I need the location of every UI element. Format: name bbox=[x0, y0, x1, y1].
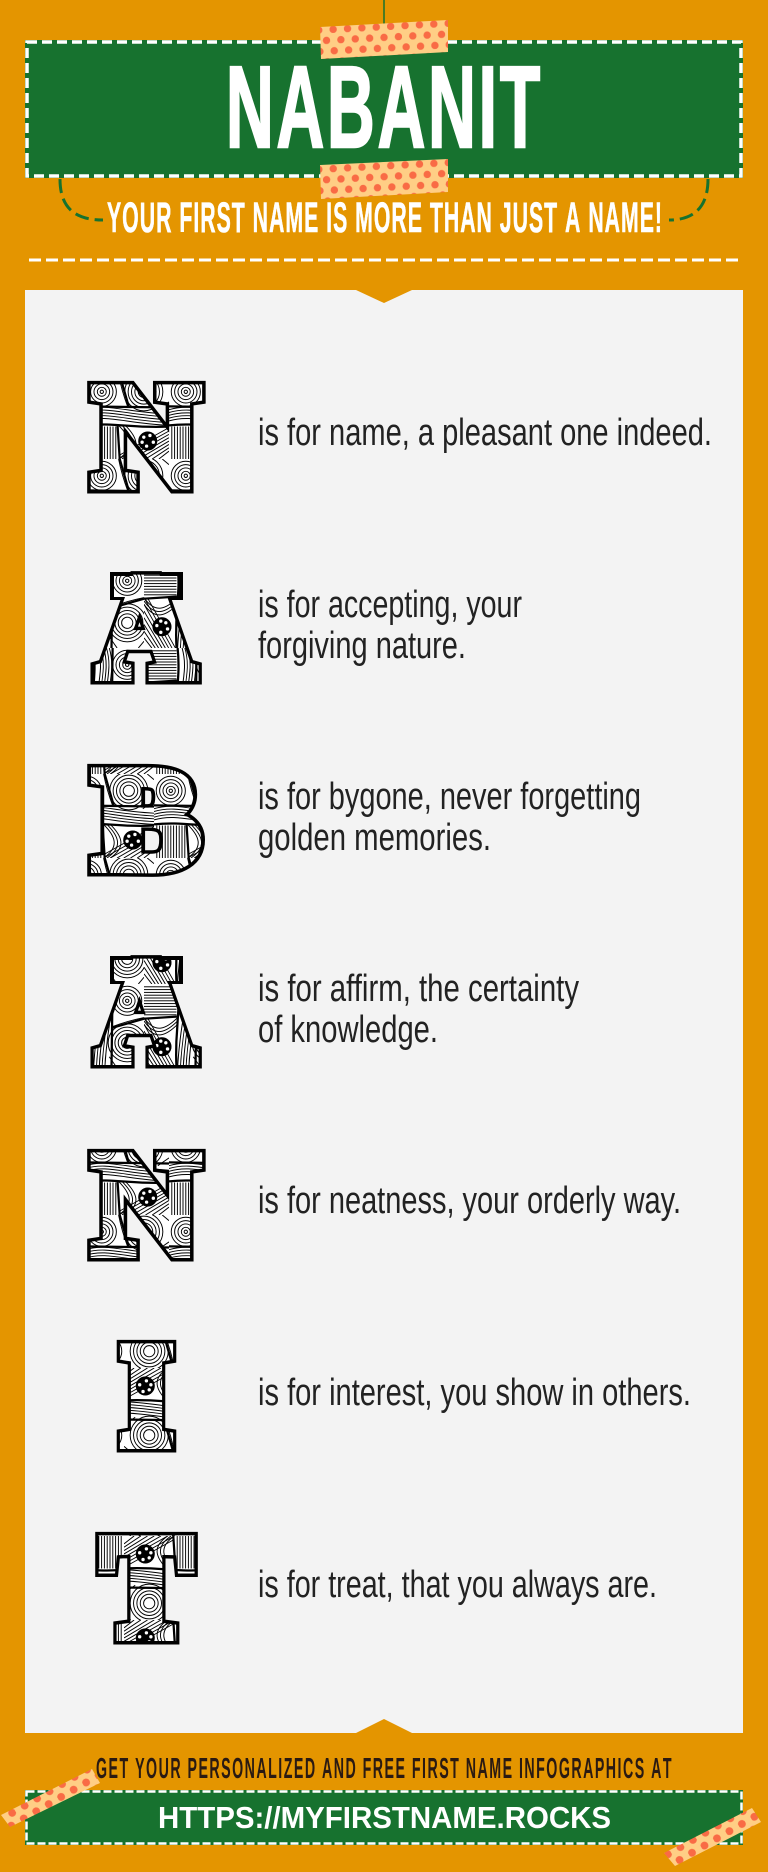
bracket: left bbox=[60, 179, 103, 220]
letter icon T: T bbox=[102, 1508, 191, 1666]
text A second: is for affirm, the certainty bbox=[258, 968, 579, 1010]
tape: top bbox=[320, 20, 448, 59]
letter icon N: N bbox=[94, 357, 198, 515]
letter icon B: B bbox=[95, 740, 199, 898]
letter icon N second: N bbox=[94, 1125, 198, 1283]
letter icon N second: N bbox=[94, 1125, 198, 1283]
text A bbox=[258, 584, 522, 667]
tape: footer right bbox=[664, 1808, 761, 1866]
title: NABANIT bbox=[226, 42, 543, 172]
row: B bbox=[95, 740, 641, 898]
letter icon A: A bbox=[98, 548, 194, 706]
text A second: of knowledge. bbox=[258, 1009, 438, 1051]
text A second bbox=[258, 968, 579, 1051]
row: N second bbox=[94, 1125, 681, 1283]
tape: bottom of banner bbox=[320, 159, 448, 199]
row: N bbox=[94, 357, 712, 515]
bracket: right bbox=[669, 179, 708, 220]
letter icon N: N bbox=[94, 357, 198, 515]
tape: footer left bbox=[1, 1769, 100, 1827]
text A: is for accepting, your bbox=[258, 584, 522, 626]
letter icon B: B bbox=[95, 740, 199, 898]
footer banner bbox=[25, 1790, 743, 1845]
row: A bbox=[98, 548, 522, 706]
dashed divider bbox=[29, 258, 738, 262]
letter icon I: I bbox=[121, 1316, 172, 1474]
letter icon A second: A bbox=[98, 932, 194, 1090]
letter icon T: T bbox=[102, 1508, 191, 1666]
row: T bbox=[102, 1508, 657, 1666]
letter icon I: I bbox=[121, 1316, 172, 1474]
hanging thread bbox=[383, 0, 385, 26]
text B: is for bygone, never forgetting bbox=[258, 776, 641, 818]
letter icon A: A bbox=[98, 548, 194, 706]
text A: forgiving nature. bbox=[258, 625, 466, 667]
text B: golden memories. bbox=[258, 817, 491, 859]
text B bbox=[258, 776, 641, 859]
footer URL: HTTPS://MYFIRSTNAME.ROCKS bbox=[158, 1801, 611, 1835]
panel: letters bbox=[25, 290, 743, 1733]
header banner bbox=[25, 40, 743, 178]
letter icon A second: A bbox=[98, 932, 194, 1090]
row: A second bbox=[98, 932, 579, 1090]
row: I bbox=[121, 1316, 691, 1474]
